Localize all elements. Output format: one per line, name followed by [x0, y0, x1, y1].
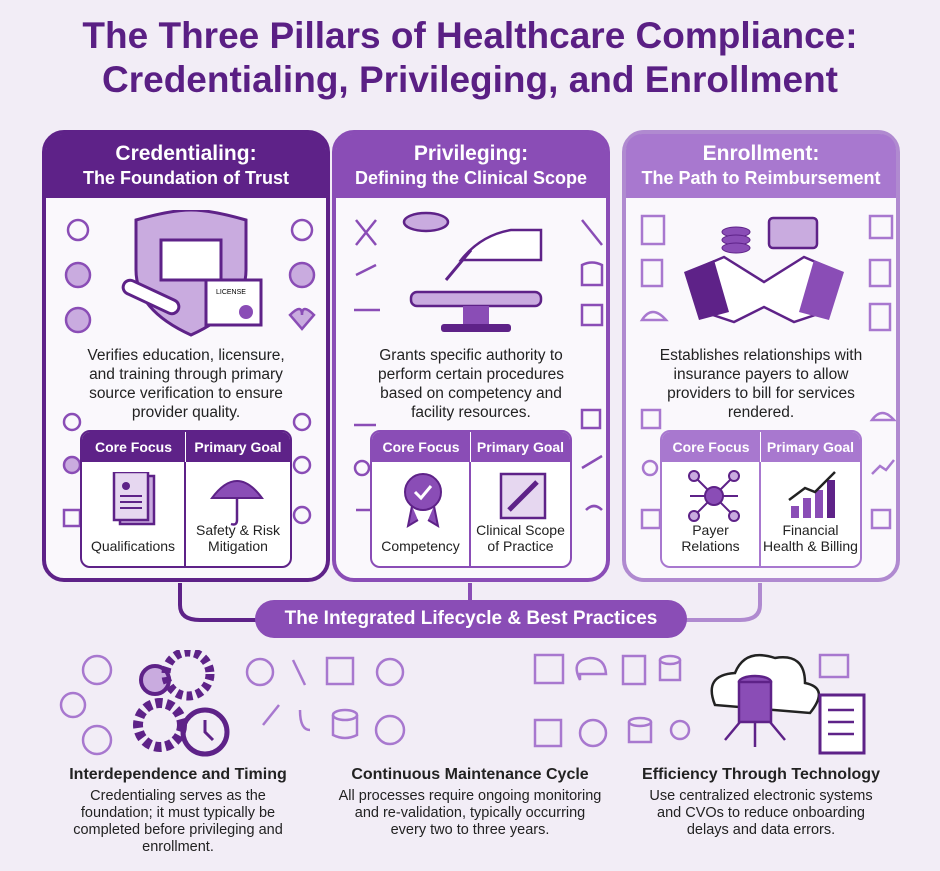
text block: interdependence: Credentialing serves as the foundation; it must typically be completed before privileging and enrollment.	[73, 788, 283, 855]
side icons	[62, 218, 316, 528]
panel header: The Path to Reimbursement	[641, 168, 881, 188]
text block: maintenance: Continuous Maintenance Cycle	[351, 766, 589, 783]
banner: integrated lifecycle: The Integrated Lifecycle & Best Practices	[285, 608, 657, 629]
panel header: The Foundation of Trust	[83, 168, 289, 188]
description: Grants specific authority to perform certain procedures based on competency and facility resources.	[378, 347, 564, 421]
title	[82, 15, 858, 100]
title: Credentialing, Privileging, and Enrollment	[102, 59, 838, 100]
banner: integrated lifecycle	[255, 600, 687, 638]
icons: gears and clock	[60, 650, 406, 756]
table: Financial	[782, 522, 839, 538]
panel header	[336, 134, 606, 198]
panel header: Credentialing:	[115, 142, 257, 165]
panel header	[46, 134, 326, 198]
table: core focus / goal	[80, 430, 292, 568]
icon: shield with book and license: LICENSE	[216, 289, 246, 296]
table: Core Focus	[382, 439, 460, 455]
panel header: Defining the Clinical Scope	[355, 168, 587, 188]
text block: technology: Efficiency Through Technology	[642, 766, 880, 783]
table: core focus / goal: Safety & Risk	[196, 522, 280, 538]
panel: credentialing	[42, 130, 330, 582]
table	[660, 430, 862, 568]
text block: technology: Use centralized electronic systems and CVOs to reduce onboarding delays and data errors.	[649, 788, 873, 838]
table: Competency	[381, 538, 460, 554]
panel: enrollment	[622, 130, 900, 582]
panel header	[626, 134, 896, 198]
description: Verifies education, licensure, and training through primary source verification to ensure provider quality.	[87, 347, 285, 421]
text block: maintenance	[338, 766, 601, 838]
table: Clinical Scope	[476, 522, 565, 538]
table: Payer	[692, 522, 729, 538]
side icons	[640, 214, 896, 530]
text block: technology	[642, 766, 880, 838]
table: core focus / goal: Core Focus	[95, 439, 172, 455]
text block: maintenance: All processes require ongoing monitoring and re-validation, typically occurring every two to three years.	[339, 788, 601, 838]
icon: handshake with coins and card	[684, 216, 844, 324]
icon: shield with book and license	[122, 210, 262, 337]
table: core focus / goal: Primary Goal	[194, 439, 282, 455]
icon: operating table and hand	[402, 212, 542, 332]
text block: interdependence: Interdependence and Timing	[69, 766, 287, 783]
table: Core Focus	[672, 439, 750, 455]
table: Primary Goal	[767, 439, 854, 455]
table	[370, 430, 572, 568]
side icons	[354, 219, 604, 512]
panel header: Enrollment:	[703, 142, 819, 165]
table: Relations	[681, 538, 740, 554]
panel header: Privileging:	[414, 142, 528, 165]
table: core focus / goal: Mitigation	[208, 538, 268, 554]
title: The Three Pillars of Healthcare Compliance:	[82, 15, 858, 56]
connector lines	[178, 583, 762, 622]
table: core focus / goal: Qualifications	[91, 538, 175, 554]
panel: privileging	[332, 130, 610, 582]
description: Establishes relationships with insurance payers to allow providers to bill for services rendered.	[660, 347, 862, 421]
icons: technology	[534, 654, 866, 754]
table: of Practice	[487, 538, 554, 554]
table: Primary Goal	[477, 439, 564, 455]
table: Health & Billing	[763, 538, 858, 554]
